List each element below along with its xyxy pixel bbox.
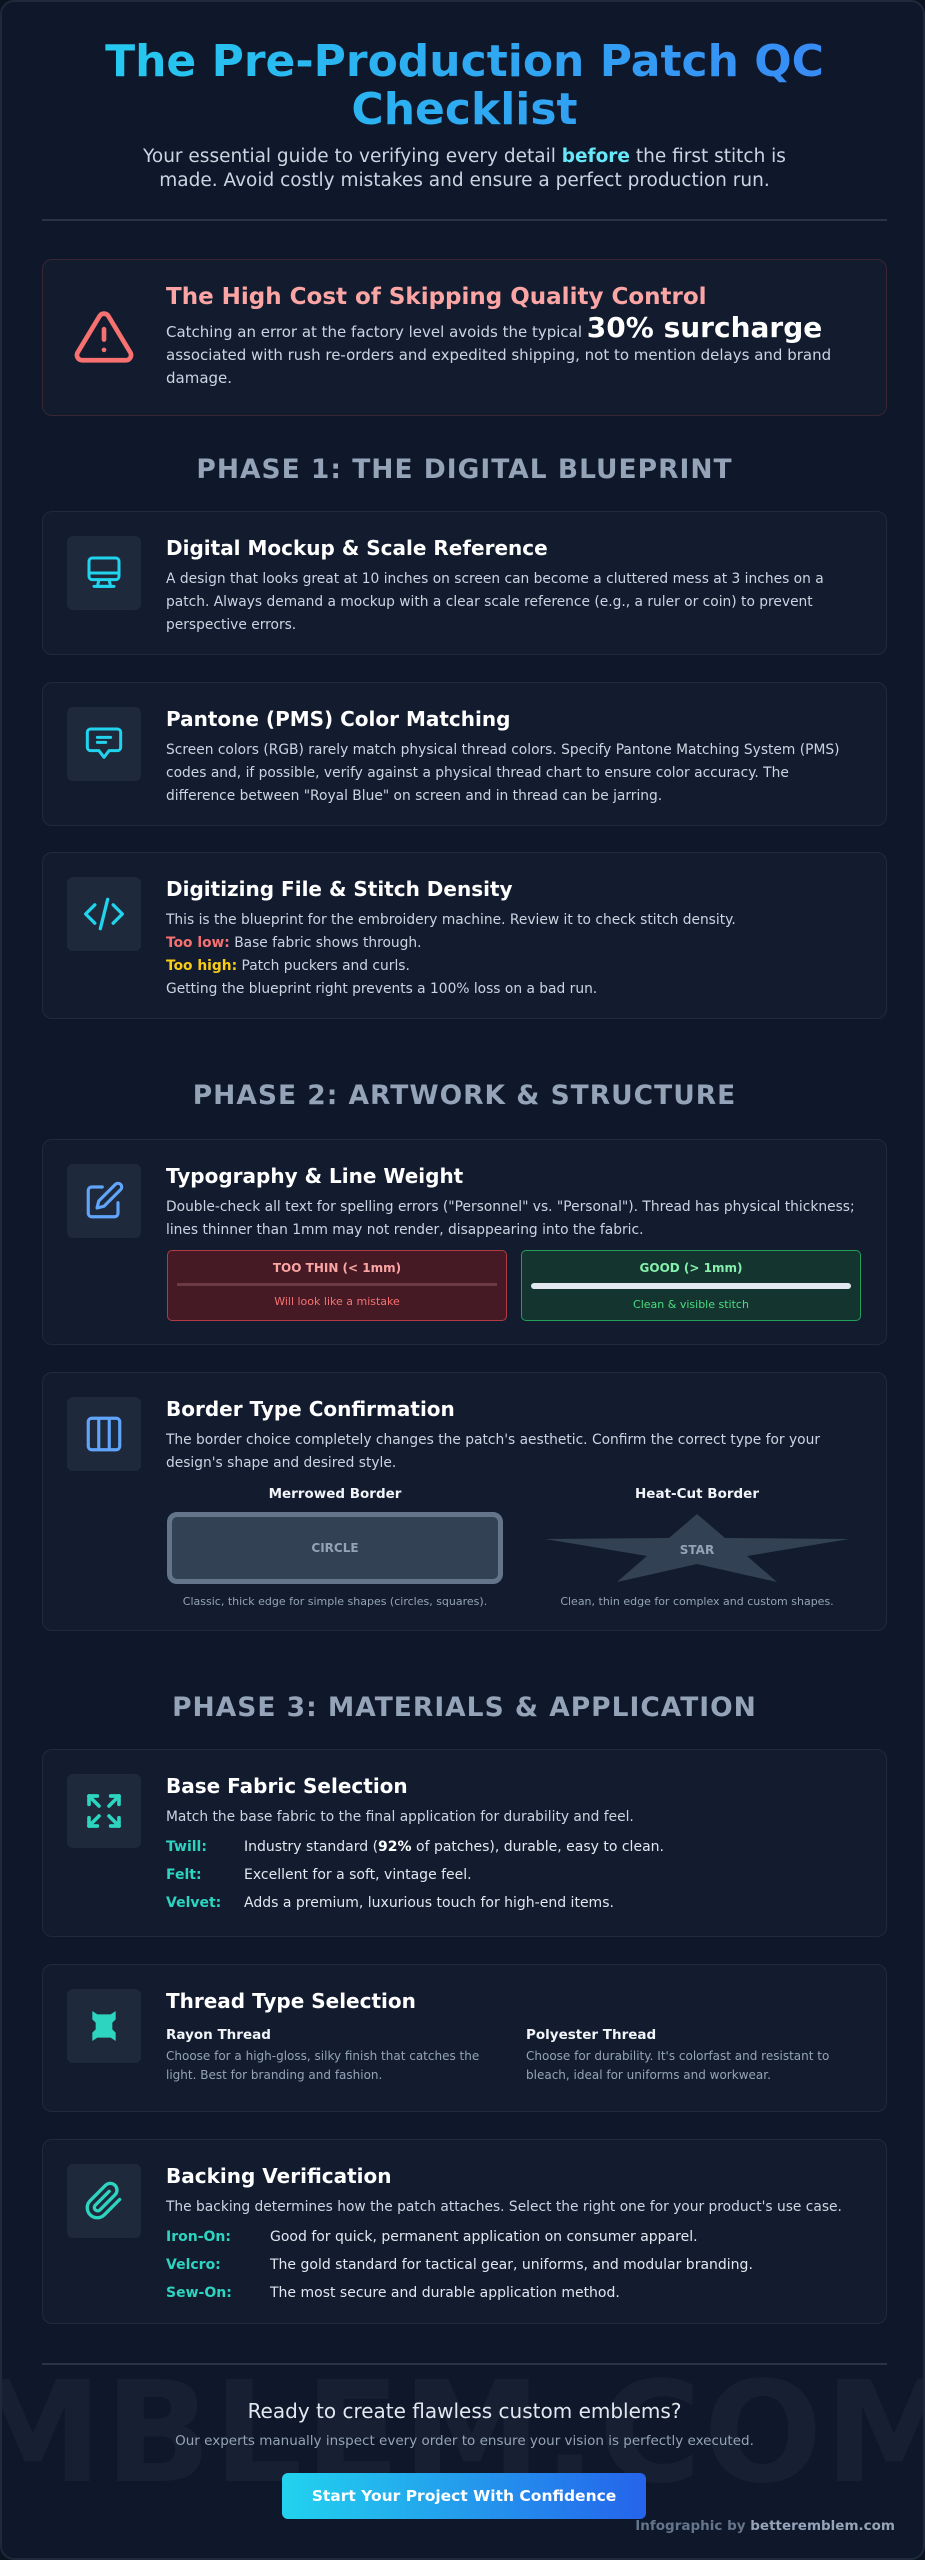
- text: A design that looks great at 10 inches on screen can become a cluttered mess at 3 inches on a patch. Always demand a mockup with a clear scale reference (e.g., a ruler or coin) to prevent perspective errors.: [166, 571, 824, 633]
- example: good: Clean & visible stitch: [633, 1298, 749, 1311]
- icon: expand: [67, 1774, 141, 1848]
- title: [2, 38, 925, 134]
- text: Thread Type Selection: [166, 1989, 416, 2013]
- text: [166, 1397, 820, 1471]
- text: Felt:: [166, 1867, 202, 1883]
- example: good: [521, 1250, 861, 1321]
- text: Typography & Line Weight: [166, 1164, 463, 1188]
- text: Double-check all text for spelling errors ("Personnel" vs. "Personal"). Thread has physical thickness; lines thinner than 1mm may not render, disappearing into the fabric.: [166, 1199, 855, 1238]
- heading: phase 3: PHASE 3: MATERIALS & APPLICATION: [172, 1692, 757, 1723]
- card: backing: [42, 2139, 887, 2324]
- text: [166, 1989, 829, 2082]
- example: too thin: [167, 1250, 507, 1321]
- text: The border choice completely changes the patch's aesthetic. Confirm the correct type for your design's shape and desired style.: [166, 1432, 820, 1471]
- CTA button: [282, 2473, 646, 2519]
- text: Digital Mockup & Scale Reference: [166, 536, 548, 560]
- text: Adds a premium, luxurious touch for high-end items.: [244, 1895, 614, 1911]
- text: The backing determines how the patch attaches. Select the right one for your product's use case.: [166, 2199, 842, 2215]
- callout text: Catching an error at the factory level avoids the typical 30% surcharge associated with rush re-orders and expedited shipping, not to mention delays and brand damage.: [166, 311, 831, 387]
- text: [166, 1164, 855, 1238]
- example: heat-cut: Heat-Cut Border: [635, 1486, 759, 1502]
- icon: warning: [74, 311, 134, 363]
- icon: chat: [67, 707, 141, 781]
- card: digital mockup: [42, 511, 887, 655]
- text: Sew-On:: [166, 2285, 232, 2301]
- subtitle: Your essential guide to verifying every detail before the first stitch is made. Avoid costly mistakes and ensure a perfect production run.: [143, 146, 786, 191]
- text: [166, 877, 736, 997]
- example: heat-cut: Clean, thin edge for complex and custom shapes.: [560, 1595, 834, 1608]
- example: merrowed: Classic, thick edge for simple shapes (circles, squares).: [183, 1595, 487, 1608]
- text: Screen colors (RGB) rarely match physical thread colors. Specify Pantone Matching System (PMS) codes and, if possible, verify against a physical thread chart to ensure color accuracy. The difference between "Royal Blue" on screen and in thread can be jarring.: [166, 742, 840, 804]
- callout text: The High Cost of Skipping Quality Control: [166, 284, 707, 310]
- example: too thin: TOO THIN (< 1mm): [273, 1261, 401, 1275]
- text: The gold standard for tactical gear, uniforms, and modular branding.: [270, 2257, 753, 2273]
- icon: pencil: [67, 1164, 141, 1238]
- credit: Infographic by betteremblem.com: [635, 2518, 895, 2534]
- card: typography: [42, 1139, 887, 1345]
- text: Excellent for a soft, vintage feel.: [244, 1867, 472, 1883]
- icon: paperclip: [67, 2164, 141, 2238]
- text: [166, 707, 840, 804]
- example: merrowed: [167, 1486, 503, 1608]
- text: Pantone (PMS) Color Matching: [166, 707, 510, 731]
- heading: phase 1: PHASE 1: THE DIGITAL BLUEPRINT: [196, 454, 733, 485]
- text: Polyester Thread: [526, 2027, 656, 2043]
- heading: phase 2: PHASE 2: ARTWORK & STRUCTURE: [193, 1080, 736, 1111]
- text: Velvet:: [166, 1895, 221, 1911]
- icon: monitor: [67, 536, 141, 610]
- icon: spool: [67, 1989, 141, 2063]
- example: merrowed: CIRCLE: [311, 1541, 359, 1555]
- text: Choose for durability. It's colorfast and resistant to bleach, ideal for uniforms and workwear.: [526, 2049, 829, 2082]
- icon: code: [67, 877, 141, 951]
- text: Border Type Confirmation: [166, 1397, 455, 1421]
- card: thread type: [42, 1964, 887, 2112]
- card: border type: [42, 1372, 887, 1631]
- text: [166, 2164, 842, 2301]
- example: too thin: Will look like a mistake: [274, 1295, 400, 1308]
- text: Base Fabric Selection: [166, 1774, 408, 1798]
- callout: high cost: [42, 259, 887, 416]
- text: Iron-On:: [166, 2229, 231, 2245]
- text: Digitizing File & Stitch Density: [166, 877, 513, 901]
- title: The Pre-Production Patch QC: [105, 36, 824, 87]
- text: The most secure and durable application method.: [270, 2285, 620, 2301]
- text: Rayon Thread: [166, 2027, 271, 2043]
- title: Checklist: [351, 84, 578, 135]
- CTA text: Ready to create flawless custom emblems?: [248, 2399, 681, 2423]
- text: Industry standard (92% of patches), durable, easy to clean.: [244, 1839, 664, 1855]
- text: Too low: Base fabric shows through.: [166, 935, 422, 951]
- text: Choose for a high-gloss, silky finish that catches the light. Best for branding and fashion.: [166, 2049, 479, 2082]
- icon: columns: [67, 1397, 141, 1471]
- text: [166, 1774, 664, 1911]
- CTA text: Our experts manually inspect every order to ensure your vision is perfectly executed.: [175, 2433, 754, 2449]
- text: Match the base fabric to the final application for durability and feel.: [166, 1809, 634, 1825]
- text: Good for quick, permanent application on consumer apparel.: [270, 2229, 698, 2245]
- text: Too high: Patch puckers and curls.: [166, 958, 410, 974]
- text: Backing Verification: [166, 2164, 392, 2188]
- example: good: GOOD (> 1mm): [640, 1261, 742, 1275]
- example: merrowed: Merrowed Border: [269, 1486, 401, 1502]
- text: This is the blueprint for the embroidery machine. Review it to check stitch density.: [166, 912, 736, 928]
- card: base fabric: [42, 1749, 887, 1937]
- text: Twill:: [166, 1839, 207, 1855]
- CTA text: [175, 2399, 754, 2449]
- card: pantone: [42, 682, 887, 826]
- CTA button: Start Your Project With Confidence: [312, 2487, 616, 2505]
- card: digitizing: [42, 852, 887, 1019]
- example: heat-cut: [546, 1486, 848, 1608]
- text: [166, 536, 824, 633]
- text: Velcro:: [166, 2257, 221, 2273]
- text: Getting the blueprint right prevents a 100% loss on a bad run.: [166, 981, 597, 997]
- example: heat-cut: STAR: [680, 1543, 714, 1557]
